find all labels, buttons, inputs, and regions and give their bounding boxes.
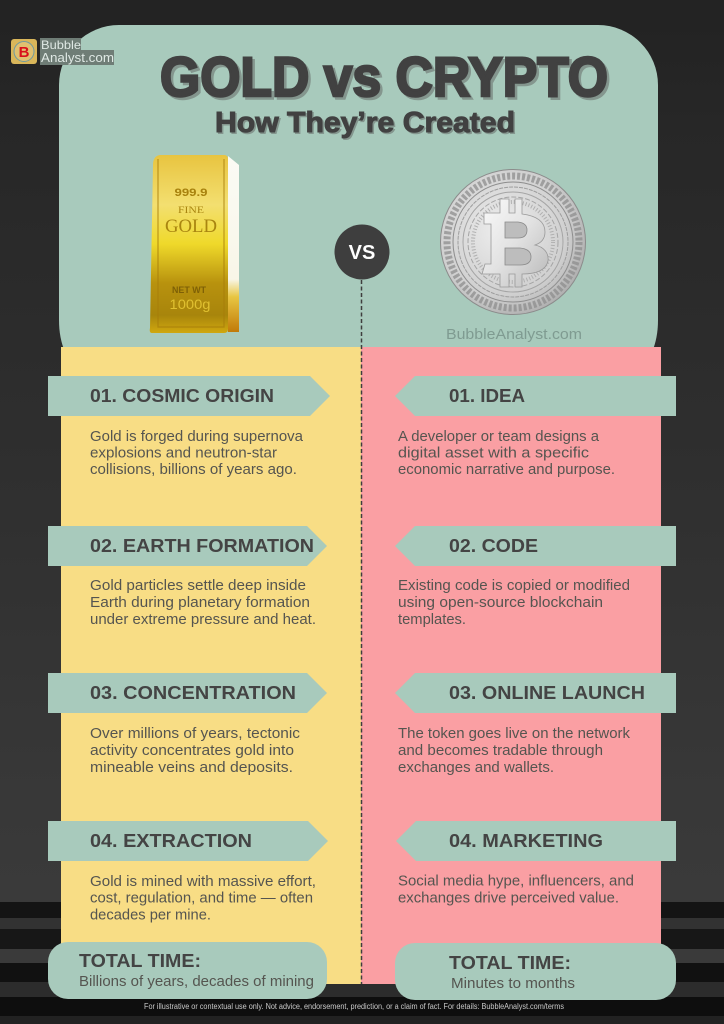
step 4: extraction	[48, 821, 328, 924]
total time: gold: Billions of years, decades of mining	[79, 974, 314, 990]
title: GOLD vs CRYPTO	[160, 45, 608, 108]
step 1: idea	[395, 376, 676, 478]
body text: decades per mine.	[90, 908, 211, 924]
icon: gold bar: NET WT	[172, 285, 206, 295]
step 2: code	[395, 526, 676, 628]
text: watermark: BubbleAnalyst.com	[446, 326, 582, 343]
subtitle: How They’re Created	[216, 108, 516, 140]
icon: gold bar: 999.9	[174, 187, 208, 199]
divider line	[360, 280, 362, 984]
body text	[90, 874, 316, 924]
panel: crypto column	[361, 347, 661, 984]
step 1: cosmic origin	[48, 376, 330, 478]
panel: gold column	[61, 347, 361, 984]
step 3: concentration	[48, 673, 327, 776]
arrow banner	[48, 526, 327, 566]
panel: header	[59, 25, 658, 352]
icon: gold bar: GOLD	[165, 216, 217, 237]
body text: Social media hype, influencers, and	[398, 874, 634, 890]
body text	[90, 726, 300, 776]
icon: gold bar	[150, 155, 239, 333]
arrow banner	[396, 821, 676, 861]
arrow banner	[395, 673, 676, 713]
body text: Gold is forged during supernova	[90, 429, 304, 445]
icon: vs badge	[334, 224, 390, 280]
body text	[398, 874, 634, 906]
step 2: earth formation	[48, 526, 327, 628]
subtitle: How They’re Created	[215, 107, 515, 139]
heading: 01. COSMIC ORIGIN	[90, 385, 274, 406]
arrow banner	[48, 376, 330, 416]
heading: 02. CODE	[449, 535, 538, 556]
body text: templates.	[398, 612, 466, 628]
body text: The token goes live on the network	[398, 726, 631, 742]
arrow banner	[48, 821, 328, 861]
body text: under extreme pressure and heat.	[90, 612, 316, 628]
heading: 03. ONLINE LAUNCH	[449, 682, 645, 703]
disclaimer: For illustrative or contextual use only. Not advice, endorsement, prediction, or a claim of fact. For details: BubbleAnalyst.com/terms	[144, 1002, 564, 1011]
icon: gold bar: FINE	[178, 206, 204, 216]
icon: vs badge: VS	[349, 242, 375, 264]
body text: exchanges drive perceived value.	[398, 890, 619, 906]
body text: Existing code is copied or modified	[398, 578, 630, 594]
total time: crypto: TOTAL TIME:	[449, 952, 571, 973]
arrow banner	[395, 526, 676, 566]
logo	[11, 38, 114, 65]
body text: Gold is mined with massive effort,	[90, 874, 316, 890]
body text: activity concentrates gold into	[90, 743, 294, 759]
heading: 04. EXTRACTION	[90, 830, 252, 851]
body text: A developer or team designs a	[398, 429, 600, 445]
body text: mineable veins and deposits.	[90, 760, 293, 776]
body text	[398, 726, 631, 776]
icon: gold bar: 1000g	[170, 296, 210, 312]
body text: economic narrative and purpose.	[398, 462, 615, 478]
heading: 04. MARKETING	[449, 830, 603, 851]
body text: digital asset with a specific	[398, 446, 589, 462]
logo: Bubble	[41, 38, 81, 52]
body text: explosions and neutron-star	[90, 446, 277, 462]
icon: bitcoin coin	[440, 170, 586, 314]
body text: using open-source blockchain	[398, 595, 603, 611]
body text: exchanges and wallets.	[398, 760, 554, 776]
body text: and becomes tradable through	[398, 743, 603, 759]
body text: Earth during planetary formation	[90, 595, 310, 611]
step 4: marketing	[396, 821, 676, 906]
arrow banner	[48, 673, 327, 713]
body text	[90, 578, 316, 628]
body text: Gold particles settle deep inside	[90, 578, 306, 594]
body text: collisions, billions of years ago.	[90, 462, 297, 478]
step 3: online launch	[395, 673, 676, 776]
total time: crypto: Minutes to months	[451, 976, 575, 992]
body text: Over millions of years, tectonic	[90, 726, 300, 742]
logo: Analyst.com	[41, 51, 114, 65]
heading: 02. EARTH FORMATION	[90, 535, 314, 556]
total time: crypto	[395, 943, 676, 1000]
heading: 01. IDEA	[449, 385, 525, 406]
arrow banner	[395, 376, 676, 416]
body text: cost, regulation, and time — often	[90, 890, 313, 906]
body text	[398, 429, 615, 478]
body text	[90, 429, 304, 478]
heading: 03. CONCENTRATION	[90, 682, 296, 703]
logo: B	[19, 44, 30, 61]
total time: gold	[48, 942, 327, 999]
total time: gold: TOTAL TIME:	[79, 950, 201, 971]
body text	[398, 578, 630, 628]
title: GOLD vs CRYPTO	[162, 48, 610, 110]
